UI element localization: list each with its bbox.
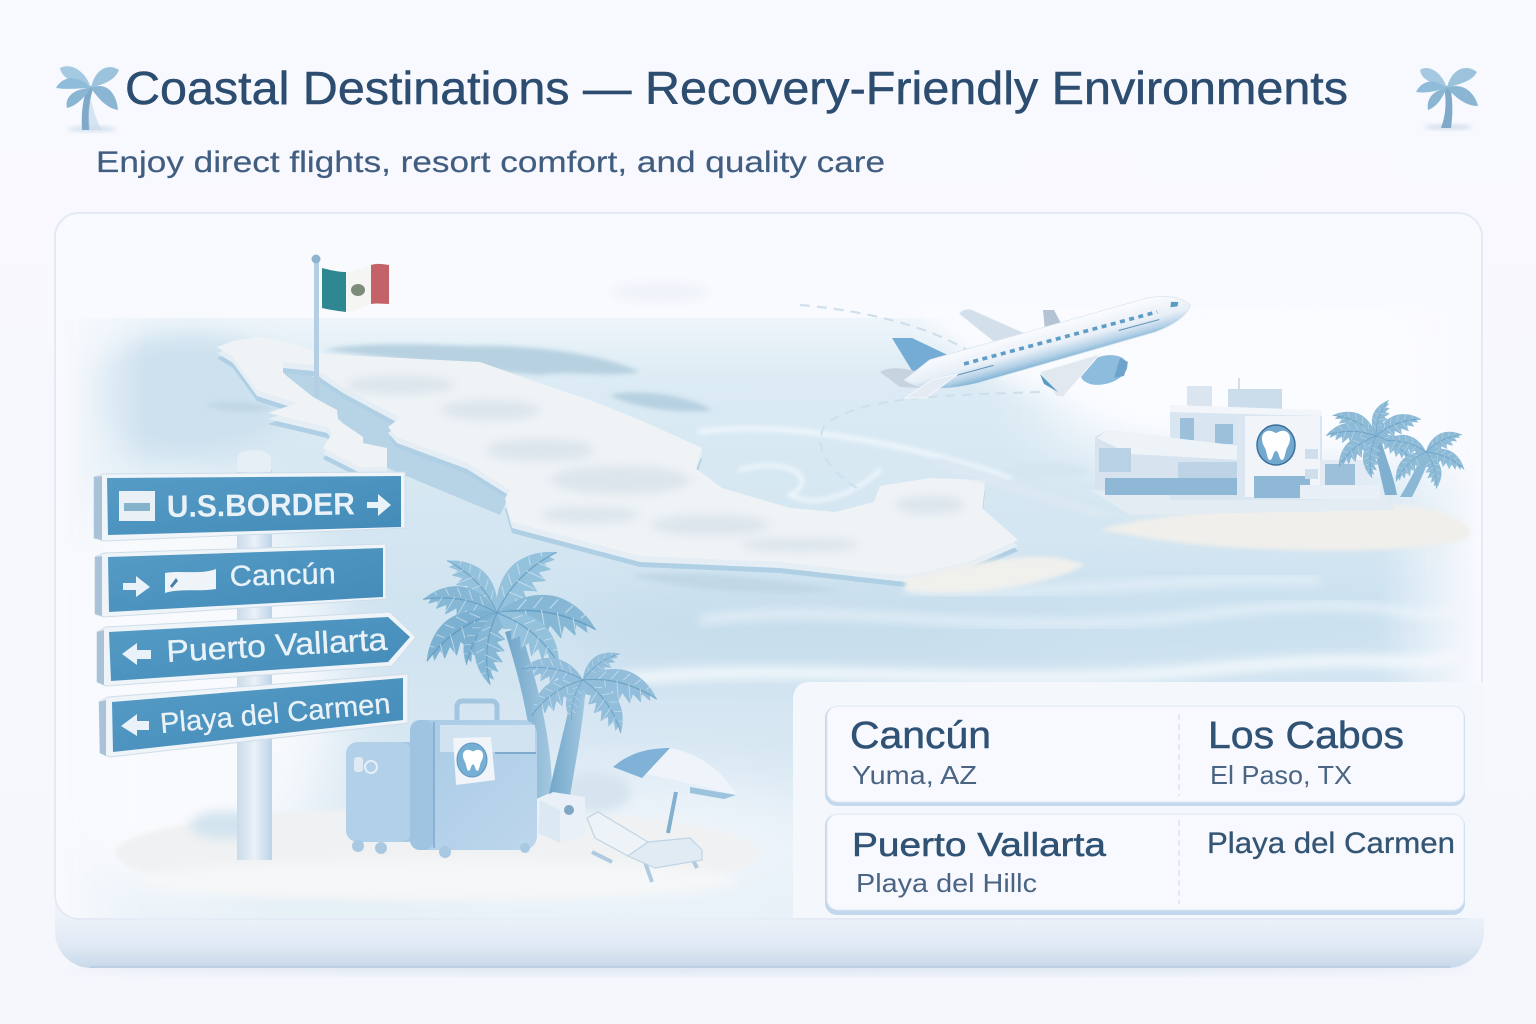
sign: Puerto Vallarta: Puerto Vallarta bbox=[165, 622, 389, 669]
distant cloud bbox=[610, 282, 710, 302]
far wing bbox=[959, 309, 1045, 358]
sign: U.S. border: U.S.BORDER bbox=[167, 486, 355, 524]
subtitle: Enjoy direct flights, resort comfort, and quality care bbox=[96, 146, 885, 179]
card: Cancún and Los Cabos: Cancún bbox=[850, 715, 991, 757]
card: Cancún and Los Cabos: Yuma, AZ bbox=[852, 760, 977, 790]
clinic palms bbox=[1325, 397, 1469, 497]
beach lounger bbox=[587, 812, 702, 882]
foreground beach island bbox=[116, 536, 760, 900]
near stabiliser bbox=[905, 374, 958, 398]
card: Puerto Vallarta and Playa del Carmen: Playa del Hillc bbox=[856, 868, 1037, 898]
dental luggage tag bbox=[453, 737, 495, 785]
card: Cancún and Los Cabos: Los Cabos bbox=[1208, 715, 1404, 757]
portable case bbox=[538, 792, 585, 843]
white swirls in channel bbox=[700, 429, 1010, 500]
land texture bbox=[345, 376, 965, 552]
roof units bbox=[1187, 386, 1212, 410]
icon: palm right bbox=[1416, 68, 1478, 130]
card: Puerto Vallarta and Playa del Carmen: Playa del Carmen bbox=[1207, 827, 1455, 860]
map of Mexico bbox=[205, 337, 1085, 593]
dental clinic with island bbox=[930, 378, 1470, 551]
shrubs bbox=[190, 811, 260, 839]
land bbox=[217, 337, 1018, 576]
tooth logo bbox=[1257, 425, 1295, 465]
lower wing bbox=[1095, 430, 1240, 495]
beach umbrella bbox=[613, 748, 736, 833]
signpost bbox=[94, 450, 416, 860]
icon: palm left bbox=[56, 66, 119, 132]
heading: Coastal Destinations — Recovery-Friendly Environments bbox=[125, 62, 1348, 114]
Mexican flag bbox=[312, 254, 389, 396]
right wing bbox=[1320, 460, 1370, 490]
engine bbox=[1077, 350, 1131, 390]
sand island bbox=[1100, 505, 1470, 551]
sea bbox=[80, 318, 1460, 918]
small suitcase bbox=[346, 742, 420, 854]
sign: Cancún: Cancún bbox=[229, 558, 336, 593]
sign: Puerto Vallarta bbox=[97, 612, 416, 686]
fuselage bbox=[900, 288, 1196, 401]
rear stabiliser bbox=[880, 368, 920, 388]
vegetation islands bbox=[205, 344, 840, 593]
post bbox=[237, 450, 272, 860]
main platform panel bbox=[55, 213, 1484, 974]
sign: Playa del Carmen bbox=[99, 674, 408, 757]
small palm bbox=[520, 643, 661, 800]
tail fin bbox=[892, 338, 954, 374]
panel: destinations bbox=[793, 682, 1484, 918]
card: Puerto Vallarta and Playa del Carmen bbox=[825, 814, 1465, 915]
upper floor bbox=[1170, 405, 1322, 500]
land side thickness bbox=[217, 348, 1018, 587]
sign: Cancún bbox=[95, 544, 386, 617]
title with palm icons bbox=[56, 62, 1478, 132]
sign: U.S. border bbox=[94, 472, 405, 541]
near wing bbox=[1040, 354, 1100, 397]
card: Cancún and Los Cabos bbox=[825, 706, 1465, 806]
beach spit bbox=[905, 557, 1085, 593]
tower front bbox=[1245, 416, 1320, 497]
gulf water bbox=[285, 365, 510, 515]
winglet bbox=[1043, 310, 1066, 342]
large suitcase bbox=[410, 701, 537, 858]
flight route bbox=[800, 305, 1040, 490]
coastal scene bbox=[0, 254, 1536, 920]
card: Cancún and Los Cabos: El Paso, TX bbox=[1210, 760, 1352, 790]
large palm bbox=[414, 536, 599, 800]
sign: Playa del Carmen: Playa del Carmen bbox=[159, 688, 392, 740]
card: Puerto Vallarta and Playa del Carmen: Puerto Vallarta bbox=[852, 826, 1107, 863]
airplane bbox=[880, 288, 1196, 401]
